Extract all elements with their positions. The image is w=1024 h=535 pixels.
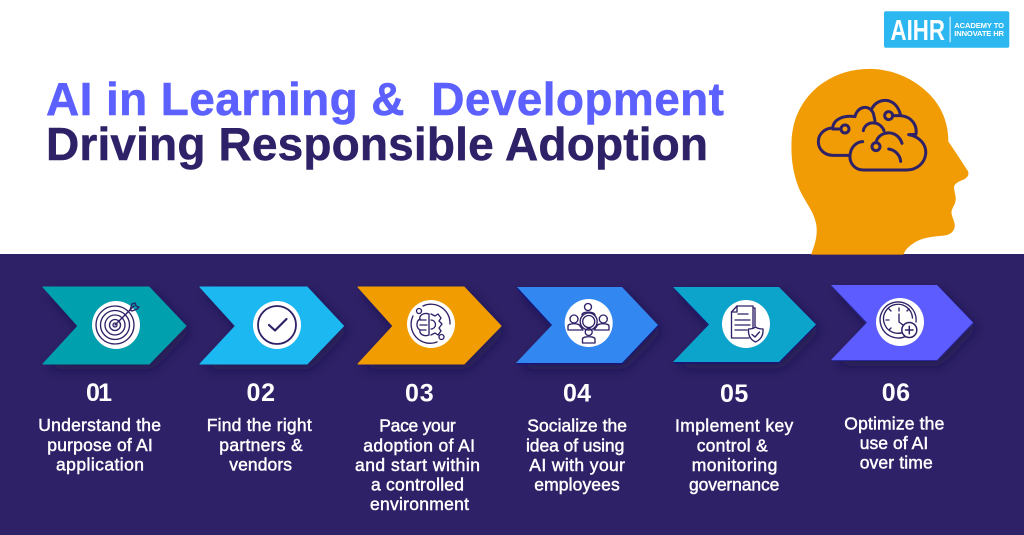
icon: target (92, 301, 140, 349)
number 03: 03 (405, 380, 434, 408)
description 2 (207, 415, 312, 475)
number 06: 06 (882, 379, 910, 407)
logo: AIHR: AIHR (890, 15, 945, 47)
description 4: AI with your (529, 455, 625, 475)
logo: AIHR (884, 11, 1009, 48)
icon: clock with plus (876, 298, 924, 346)
step 5 (673, 287, 817, 495)
description 5: governance (689, 475, 779, 495)
description 3 (355, 416, 480, 514)
title: Driving Responsible Adoption (46, 118, 708, 170)
step 6 (831, 285, 974, 472)
description 4: employees (534, 475, 620, 495)
number 05: 05 (720, 380, 748, 408)
description 3: and start within (355, 455, 480, 475)
description 5: Implement key (675, 416, 794, 436)
logo: AIHR: ACADEMY TO (954, 21, 1004, 30)
description 6: use of AI (860, 433, 928, 453)
description 1: Understand the (38, 415, 161, 435)
number 01: 01 (86, 379, 112, 407)
icon: check (253, 301, 301, 349)
description 2: partners & (219, 435, 303, 455)
description 3: environment (370, 494, 469, 514)
chevron 2 (200, 287, 344, 364)
chevron 5 (673, 287, 817, 364)
description 1 (38, 415, 161, 475)
description 6: over time (860, 452, 933, 472)
chevron 1 (43, 287, 186, 364)
description 4: Socialize the (527, 416, 627, 436)
step 1 (38, 287, 186, 475)
step 2 (200, 287, 344, 475)
description 3: adoption of AI (363, 436, 475, 456)
title (46, 73, 724, 170)
description 6: Optimize the (844, 413, 944, 433)
description 5: control & (697, 436, 768, 456)
title: AI in Learning & Development (46, 73, 724, 125)
chevron 3 (358, 287, 501, 364)
description 2: vendors (229, 455, 292, 475)
dark lower band (0, 254, 1024, 535)
description 4: idea of using (526, 436, 624, 456)
description 1: purpose of AI (47, 435, 153, 455)
description 5: monitoring (692, 455, 777, 475)
description 3: Pace your (379, 416, 456, 436)
description 2: Find the right (207, 415, 312, 435)
icon: document with shield (722, 300, 770, 348)
icon: team around table (565, 299, 613, 347)
icon: brain (818, 100, 926, 170)
chevron 4 (516, 287, 659, 364)
number 02: 02 (246, 379, 275, 407)
description 5 (675, 416, 794, 495)
logo: AIHR: INNOVATE HR (954, 29, 1005, 38)
description 1: application (56, 455, 144, 475)
description 4 (526, 416, 627, 495)
step 4 (516, 287, 659, 495)
description 3: a controlled (371, 475, 464, 495)
icon: brain and gear (407, 300, 455, 348)
step 3 (355, 287, 501, 514)
chevron 6 (831, 285, 974, 361)
description 6 (844, 413, 944, 472)
number 04: 04 (563, 380, 591, 408)
icon: head with brain (791, 69, 968, 255)
